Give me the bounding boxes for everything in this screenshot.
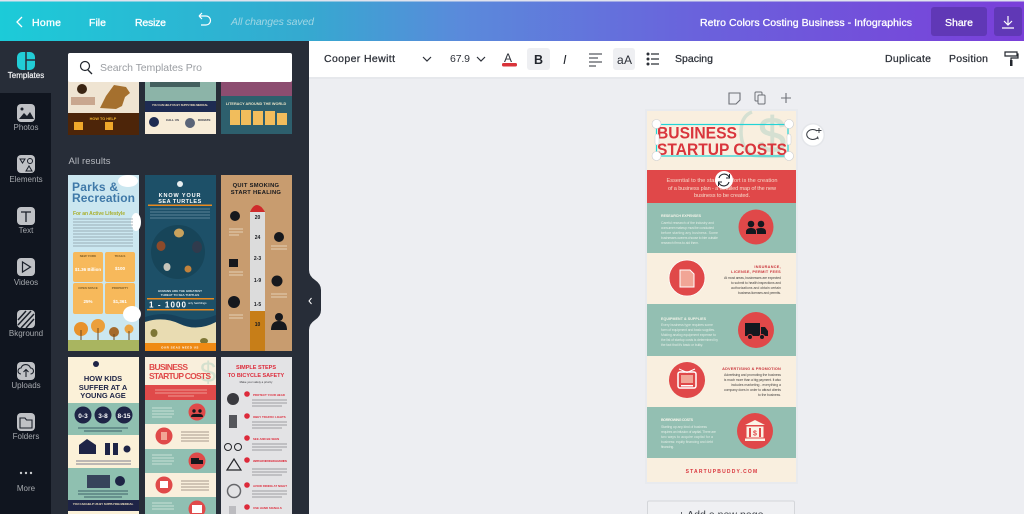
download button (994, 7, 1022, 36)
top row thumbnail: call us donate: YOU CAN HELP US BY SUPPLYING MEDICAL (152, 103, 208, 107)
template: bicycle safety: SEE AND BE SEEN (253, 437, 279, 441)
footer url: STARTUPBUDDY.COM (686, 469, 758, 475)
template: parks and recreation: Recreation (72, 191, 135, 205)
section: equipment and supplies: the fact that it's basic or bulky. (661, 343, 703, 347)
sidebar item: elements: Elements (9, 175, 43, 184)
icon: bank (745, 420, 765, 441)
section: advertising and promotion: company does in order to attract clients (724, 388, 781, 392)
template: sea turtles: OUR SEAS NEED US (161, 346, 199, 350)
sidebar item: photos (14, 104, 38, 132)
sidebar item: folders: Folders (13, 432, 39, 441)
section: borrowing costs: Starting up any kind of business (661, 425, 707, 429)
template: quit smoking: 2-3 (254, 256, 261, 262)
template: how kids suffer: HOW KIDS (84, 374, 122, 383)
sidebar item: uploads (11, 362, 41, 390)
template: bicycle safety: TO BICYCLE SAFETY (228, 373, 285, 379)
icon: truck (745, 323, 768, 340)
template: how kids suffer (68, 357, 139, 514)
template: how kids suffer: SUFFER AT A (79, 383, 128, 392)
intro band: of a business plan - a detailed map of the new (668, 186, 777, 192)
section: borrowing costs: BORROWING COSTS (661, 418, 694, 422)
template: bicycle safety: WATCH FOR ROAD HAZARDS (253, 459, 287, 463)
template: quit smoking: 10 (255, 322, 260, 328)
top navigation bar: File (89, 17, 106, 29)
sidebar rail (0, 41, 51, 514)
template: parks and recreation: For an Active Lifestyle (73, 211, 125, 217)
section: borrowing costs (647, 407, 796, 458)
section: insurance and permit fees: LICENSE, PERMIT FEES (731, 270, 781, 274)
editor toolbar: Spacing (675, 53, 713, 65)
template: sea turtles: THREAT TO SEA TURTLES (161, 293, 199, 297)
panel collapse handle (309, 270, 321, 330)
section: borrowing costs: business: equity financing and debt (661, 440, 713, 444)
editor toolbar: Duplicate (885, 53, 931, 65)
section: insurance and permit fees: authorizations and obtain certain (731, 286, 781, 290)
intro band: Essential to the start-up effort is the creation (666, 178, 778, 184)
editor toolbar: 67.9 (450, 53, 470, 65)
section: research expenses: consumer makeup must be conducted (661, 226, 714, 230)
intro band (647, 170, 796, 203)
icon: bank: $ (753, 430, 757, 438)
template: how kids suffer: 3-8 (98, 413, 108, 420)
intro band: business to be created. (694, 193, 750, 199)
title: BUSINESS (657, 124, 737, 142)
section: advertising and promotion: Advertising and promoting the business (724, 373, 781, 377)
section: borrowing costs: financing. (661, 445, 674, 449)
editor toolbar: I (563, 53, 567, 67)
top row thumbnail: dog rescue (68, 80, 139, 135)
template: sea turtles: SEA TURTLES (158, 199, 202, 205)
header dollar watermark (741, 107, 790, 163)
template: how kids suffer: YOUNG AGE (80, 391, 126, 400)
sidebar item: background (9, 310, 43, 338)
section: equipment and supplies: form of equipment and basic supplies. (661, 328, 715, 332)
section: equipment and supplies (647, 304, 796, 356)
top row thumbnail: literacy chart: LITERACY AROUND THE WORLD (226, 102, 287, 106)
template: parks and recreation: $1,361 (113, 299, 127, 304)
template: bicycle safety: OBEY TRAFFIC LIGHTS (253, 415, 286, 419)
template: how kids suffer: YOU CAN HELP US BY SUPPLYING MEDICAL (73, 502, 134, 506)
section: research expenses: businesses owners choose to hire outside (661, 236, 718, 240)
section: advertising and promotion (669, 362, 781, 398)
template: quit smoking: 1-9 (254, 278, 261, 284)
template: parks and recreation: PROPERTY (112, 286, 128, 290)
top row thumbnail: call us donate: DONATE (198, 118, 210, 122)
template: how kids suffer: 0-3 (78, 413, 88, 420)
sidebar item: elements (9, 155, 43, 184)
template: bicycle safety: PROTECT YOUR HEAD (253, 393, 285, 397)
template: parks and recreation: OPEN SPACE (78, 286, 98, 290)
page action icons (729, 92, 791, 104)
share button (931, 7, 987, 36)
search box: Search Templates Pro (100, 62, 202, 74)
template: business startup costs (145, 357, 216, 514)
template: bicycle safety: SIMPLE STEPS (236, 365, 276, 371)
template: bicycle safety: Make your safety a priority (240, 380, 273, 384)
top navigation bar: Home (32, 17, 61, 29)
section: insurance and permit fees: At most areas, businesses are expected (724, 276, 781, 280)
section: insurance and permit fees: to submit to health inspections and (731, 281, 781, 285)
sidebar item: uploads: Uploads (11, 381, 41, 390)
template: quit smoking: 20 (255, 215, 260, 221)
rotate handle (715, 171, 733, 189)
editor toolbar (309, 41, 1024, 79)
infographic page (645, 107, 798, 484)
section: insurance and permit fees: business licenses and permits. (738, 291, 781, 295)
section: equipment and supplies: Every business type requires some (661, 323, 713, 327)
template: sea turtles: HUMANS ARE THE GREATEST (158, 289, 202, 293)
template: how kids suffer: 8-15 (117, 413, 131, 420)
editor toolbar: A (504, 51, 512, 65)
section: research expenses: Careful research of the industry and (661, 221, 714, 225)
editor toolbar: Position (949, 53, 988, 65)
sidebar item: background: Bkground (9, 329, 43, 338)
sidebar item: more (17, 472, 36, 493)
template: business startup costs: $ (200, 357, 216, 389)
section: insurance and permit fees (669, 260, 781, 296)
template: sea turtles: 1 - 1000 (149, 300, 187, 310)
top navigation bar: Retro Colors Costing Business - Infographics (700, 17, 912, 29)
section: research expenses: before starting any business. Some (661, 231, 718, 235)
sidebar item: templates (8, 52, 44, 80)
top row thumbnail: dog rescue: HOW TO HELP (90, 117, 117, 121)
template: quit smoking: START HEALING (231, 190, 281, 196)
title (657, 124, 787, 159)
top row thumbnail: call us donate (145, 80, 216, 134)
template: parks and recreation (68, 175, 141, 351)
sidebar item: videos: Videos (14, 278, 38, 287)
sidebar item: templates: Templates (8, 71, 44, 80)
share button: Share (945, 17, 973, 29)
template: business startup costs: BUSINESS (149, 362, 188, 372)
template: sea turtles: KNOW YOUR (159, 193, 201, 199)
heading: all results: All results (68, 156, 111, 167)
template: quit smoking: QUIT SMOKING (233, 183, 280, 189)
editor toolbar: aA (617, 53, 632, 67)
section: equipment and supplies: Making analog equipment expense to (661, 333, 716, 337)
template: parks and recreation: $100 (115, 266, 126, 271)
top navigation bar: Resize (135, 17, 166, 29)
template: parks and recreation: $1.36 Billion (75, 267, 101, 272)
section: research expenses (647, 203, 796, 253)
template: quit smoking (221, 175, 292, 351)
template: parks and recreation: Parks & (72, 180, 118, 194)
sidebar item: photos: Photos (14, 123, 38, 132)
template: sea turtles (145, 175, 216, 351)
template: business startup costs: STARTUP COSTS (149, 371, 211, 381)
section: borrowing costs: requires an infusion of capital. There are (661, 430, 716, 434)
template: quit smoking: 1-5 (254, 302, 261, 308)
template: parks and recreation: TRAILS (115, 254, 125, 258)
section: advertising and promotion: is much more than a big payment. It also (724, 378, 781, 382)
template: bicycle safety (221, 357, 292, 514)
text selection frame (652, 120, 794, 160)
icon: television (678, 369, 696, 388)
sidebar item: more: More (17, 484, 36, 493)
title: STARTUP COSTS (657, 141, 787, 159)
template: parks and recreation: 25% (83, 299, 93, 304)
section: research expenses: RESEARCH EXPENSES (661, 214, 702, 218)
top row thumbnail: literacy chart (221, 80, 292, 134)
section: insurance and permit fees: INSURANCE, (754, 265, 781, 269)
header dollar watermark: $ (758, 107, 786, 163)
section: advertising and promotion: ADVERTISING & PROMOTION (722, 367, 781, 371)
top navigation bar (0, 0, 1024, 41)
canvas background (309, 77, 1024, 514)
template: bicycle safety: USE HAND SIGNALS (253, 506, 282, 510)
templates side panel (51, 41, 309, 514)
icon: document (680, 270, 694, 287)
sidebar item: text (17, 207, 35, 235)
sidebar item: videos (14, 258, 38, 287)
add a new page button (648, 501, 794, 514)
section: borrowing costs: two ways to acquire capital for a (661, 435, 713, 439)
top row thumbnail: call us donate: CALL US (166, 118, 179, 122)
icon: people (746, 221, 766, 234)
template: bicycle safety: AVOID RIDING AT NIGHT (253, 484, 287, 488)
section: research expenses: research firms to aid them. (661, 241, 699, 245)
template: sea turtles: only hatchlings (188, 301, 207, 305)
sidebar item: text: Text (19, 226, 34, 235)
template: quit smoking: 24 (255, 235, 260, 241)
top navigation bar: All changes saved (230, 16, 315, 28)
section: advertising and promotion: includes marketing - everything a (731, 383, 781, 387)
editor toolbar: Cooper Hewitt (324, 53, 395, 65)
sidebar item: folders (13, 413, 39, 441)
section: equipment and supplies: the list of startup costs is determined by (661, 338, 718, 342)
editor toolbar: B (534, 53, 543, 67)
section: equipment and supplies: EQUIPMENT & SUPPLIES (661, 317, 707, 321)
add comment button (801, 123, 825, 147)
search box (68, 53, 292, 82)
template: parks and recreation: NEW YORK (80, 254, 97, 258)
section: advertising and promotion: to the business. (758, 393, 781, 397)
